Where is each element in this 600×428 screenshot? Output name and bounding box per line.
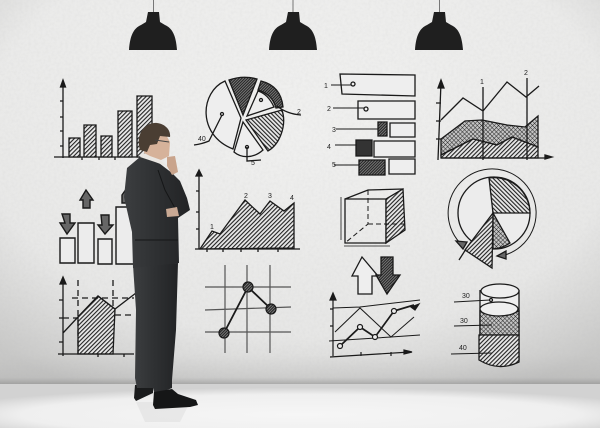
labels: peak numbers: 4: [290, 195, 294, 202]
labels: list numbers: 3: [332, 127, 336, 134]
chart: hatched bar chart: [54, 80, 152, 160]
person: hand at waist: [166, 207, 179, 217]
person: hand at chin: [167, 156, 178, 175]
person: businessman: [124, 123, 198, 422]
labels: peak numbers: 3: [268, 193, 272, 200]
chart: mountain area with markers: [195, 170, 300, 252]
person: neck and collar: [140, 153, 166, 166]
labels: list numbers: 4: [327, 144, 331, 151]
label: 2: 2: [297, 109, 301, 116]
labels: list numbers: 5: [332, 162, 336, 169]
person: trousers: [133, 263, 178, 395]
chart: hatched line chart: [58, 277, 136, 357]
chart: arrows above bars: [60, 185, 134, 264]
shoe reflection: [136, 402, 190, 422]
labels: chart markers: [480, 70, 528, 86]
icon: ceiling lamp right: [415, 0, 463, 50]
labels: cylinder values: 40: [459, 345, 467, 352]
chart: rising line chart: [329, 293, 420, 357]
labels: cylinder values: 30: [462, 293, 470, 300]
labels: peak numbers: [210, 193, 294, 231]
list chart: five bars: [324, 74, 415, 175]
chart: cylinder with labels: [451, 284, 519, 367]
labels: chart markers: 1: [480, 79, 484, 86]
icon: ceiling lamp middle: [269, 0, 317, 50]
labels: peak numbers: 2: [244, 193, 248, 200]
labels: list numbers: 1: [324, 83, 328, 90]
labels: chart markers: 2: [524, 70, 528, 77]
icon: up and down arrows: [352, 257, 400, 294]
chart: pie with ring: [448, 169, 536, 268]
labels: cylinder values: [459, 293, 470, 352]
person: back shoe: [134, 383, 153, 401]
labels: peak numbers: 1: [210, 224, 214, 231]
person: sleeve line: [135, 170, 178, 240]
person: face: [144, 133, 170, 160]
person: glasses: [155, 140, 169, 142]
floor: [0, 384, 600, 428]
icon: cube: [341, 189, 405, 246]
chart: exploded pie: [194, 77, 301, 167]
person: front shoe: [153, 389, 198, 409]
icon: ceiling lamp left: [129, 0, 177, 50]
person: hair: [139, 123, 170, 152]
label: 40: 40: [198, 136, 206, 143]
person: jacket: [124, 157, 190, 268]
labels: cylinder values: 30: [460, 318, 468, 325]
chart: grid with three points: [205, 265, 291, 353]
label: 5: 5: [251, 160, 255, 167]
labels: list numbers: [324, 83, 336, 169]
chart: layered area chart: [436, 70, 552, 160]
labels: list numbers: 2: [327, 106, 331, 113]
